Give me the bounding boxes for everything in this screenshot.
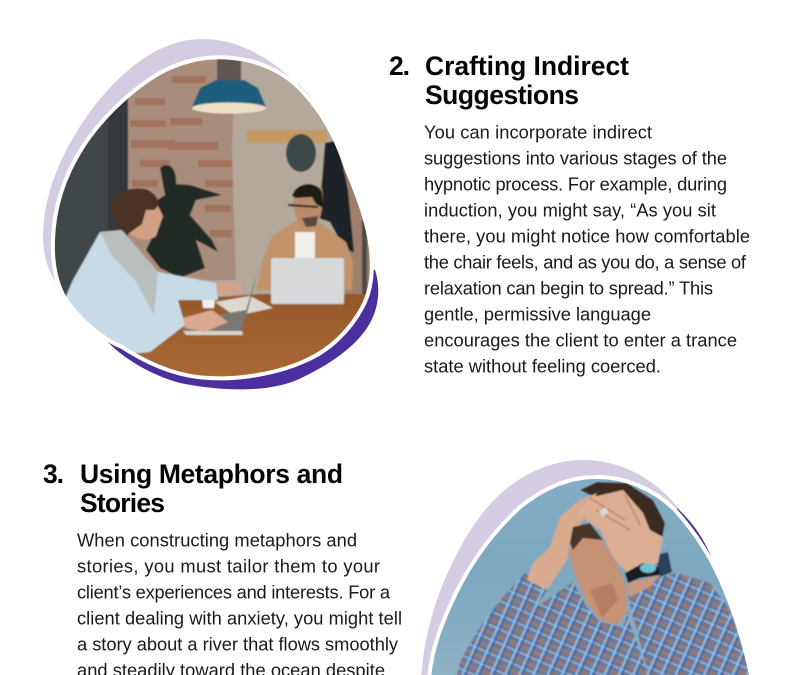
heading: section 2: Suggestions [425,80,579,110]
left laptop [182,276,256,332]
papers [215,296,273,316]
text block: section 2 body: the chair feels, and as you do, a sense of [424,252,747,272]
heading: section 3: 3. [43,459,64,489]
table [136,293,366,376]
brick wall [128,60,236,280]
photo: man holding his head [432,479,749,675]
left man: hands [183,310,228,332]
left forearm [527,493,597,590]
decoration: lavender crescent behind photo [421,460,680,675]
left sleeve and chest [455,573,650,675]
text block: section 2 body: hypnotic process. For example, during [424,174,727,194]
text block: section 2 body: state without feeling coerced. [424,356,661,376]
image: stressed man photo in organic blob [420,460,760,675]
heading: section 2: Crafting Indirect [425,51,629,81]
text block: section 2 body [424,122,750,376]
heading: section 3: Using Metaphors and [80,459,343,489]
heading: section 2 [389,51,629,110]
right man: head [293,186,323,228]
text block: section 3 body [77,530,402,675]
face [569,530,627,625]
right wrist [627,575,660,597]
right laptop [271,258,344,304]
text block: section 2 body: You can incorporate indirect [424,122,652,142]
cup [201,299,216,310]
ring [599,507,609,517]
text block: section 3 body: client dealing with anxiety, you might tell [77,608,402,628]
photo: two men at a table [54,59,370,376]
image: meeting photo in organic blob [40,39,385,390]
front hair [570,523,603,550]
dark collar [655,552,672,577]
hair [580,481,666,538]
text block: section 3 body: When constructing metaphors and [77,530,357,550]
text block: section 2 body: gentle, permissive language [424,304,651,324]
plant [146,165,222,278]
left man: body [60,230,218,355]
text block: section 2 body: suggestions into various stages of the [424,148,727,168]
right sleeve [628,573,752,675]
text block: section 2 body: relaxation can begin to spread.” This [424,278,713,298]
heading: section 3 [43,459,343,518]
text block: section 2 body: encourages the client to enter a trance [424,330,737,350]
text block: section 3 body: client’s experiences and interests. For a [77,582,391,602]
left man: head [129,204,164,240]
heading: section 2: 2. [389,51,410,81]
hat [286,134,316,172]
decoration: purple sliver [677,508,717,572]
text block: section 3 body: stories, you must tailor them to your [77,556,380,576]
coat [318,140,354,252]
right man: jacket [256,222,353,290]
heading: section 3: Stories [80,488,165,518]
coat rack [247,130,327,143]
watch [625,563,660,583]
decoration: white outline of photo [53,57,372,378]
decoration: purple crescent lower right [104,250,378,389]
right hand [577,490,663,573]
text block: section 3 body: a story about a river that flows smoothly [77,634,399,654]
text block: section 2 body: induction, you might say, “As you sit [424,200,716,220]
decoration: purple sliver upper right [298,84,339,152]
decoration: white outline of photo [429,477,752,675]
decoration: lavender crescent behind photo [43,39,303,285]
text block: section 2 body: there, you might notice how comfortable [424,226,750,246]
right wall and brick [344,170,370,295]
lamp [217,58,241,82]
